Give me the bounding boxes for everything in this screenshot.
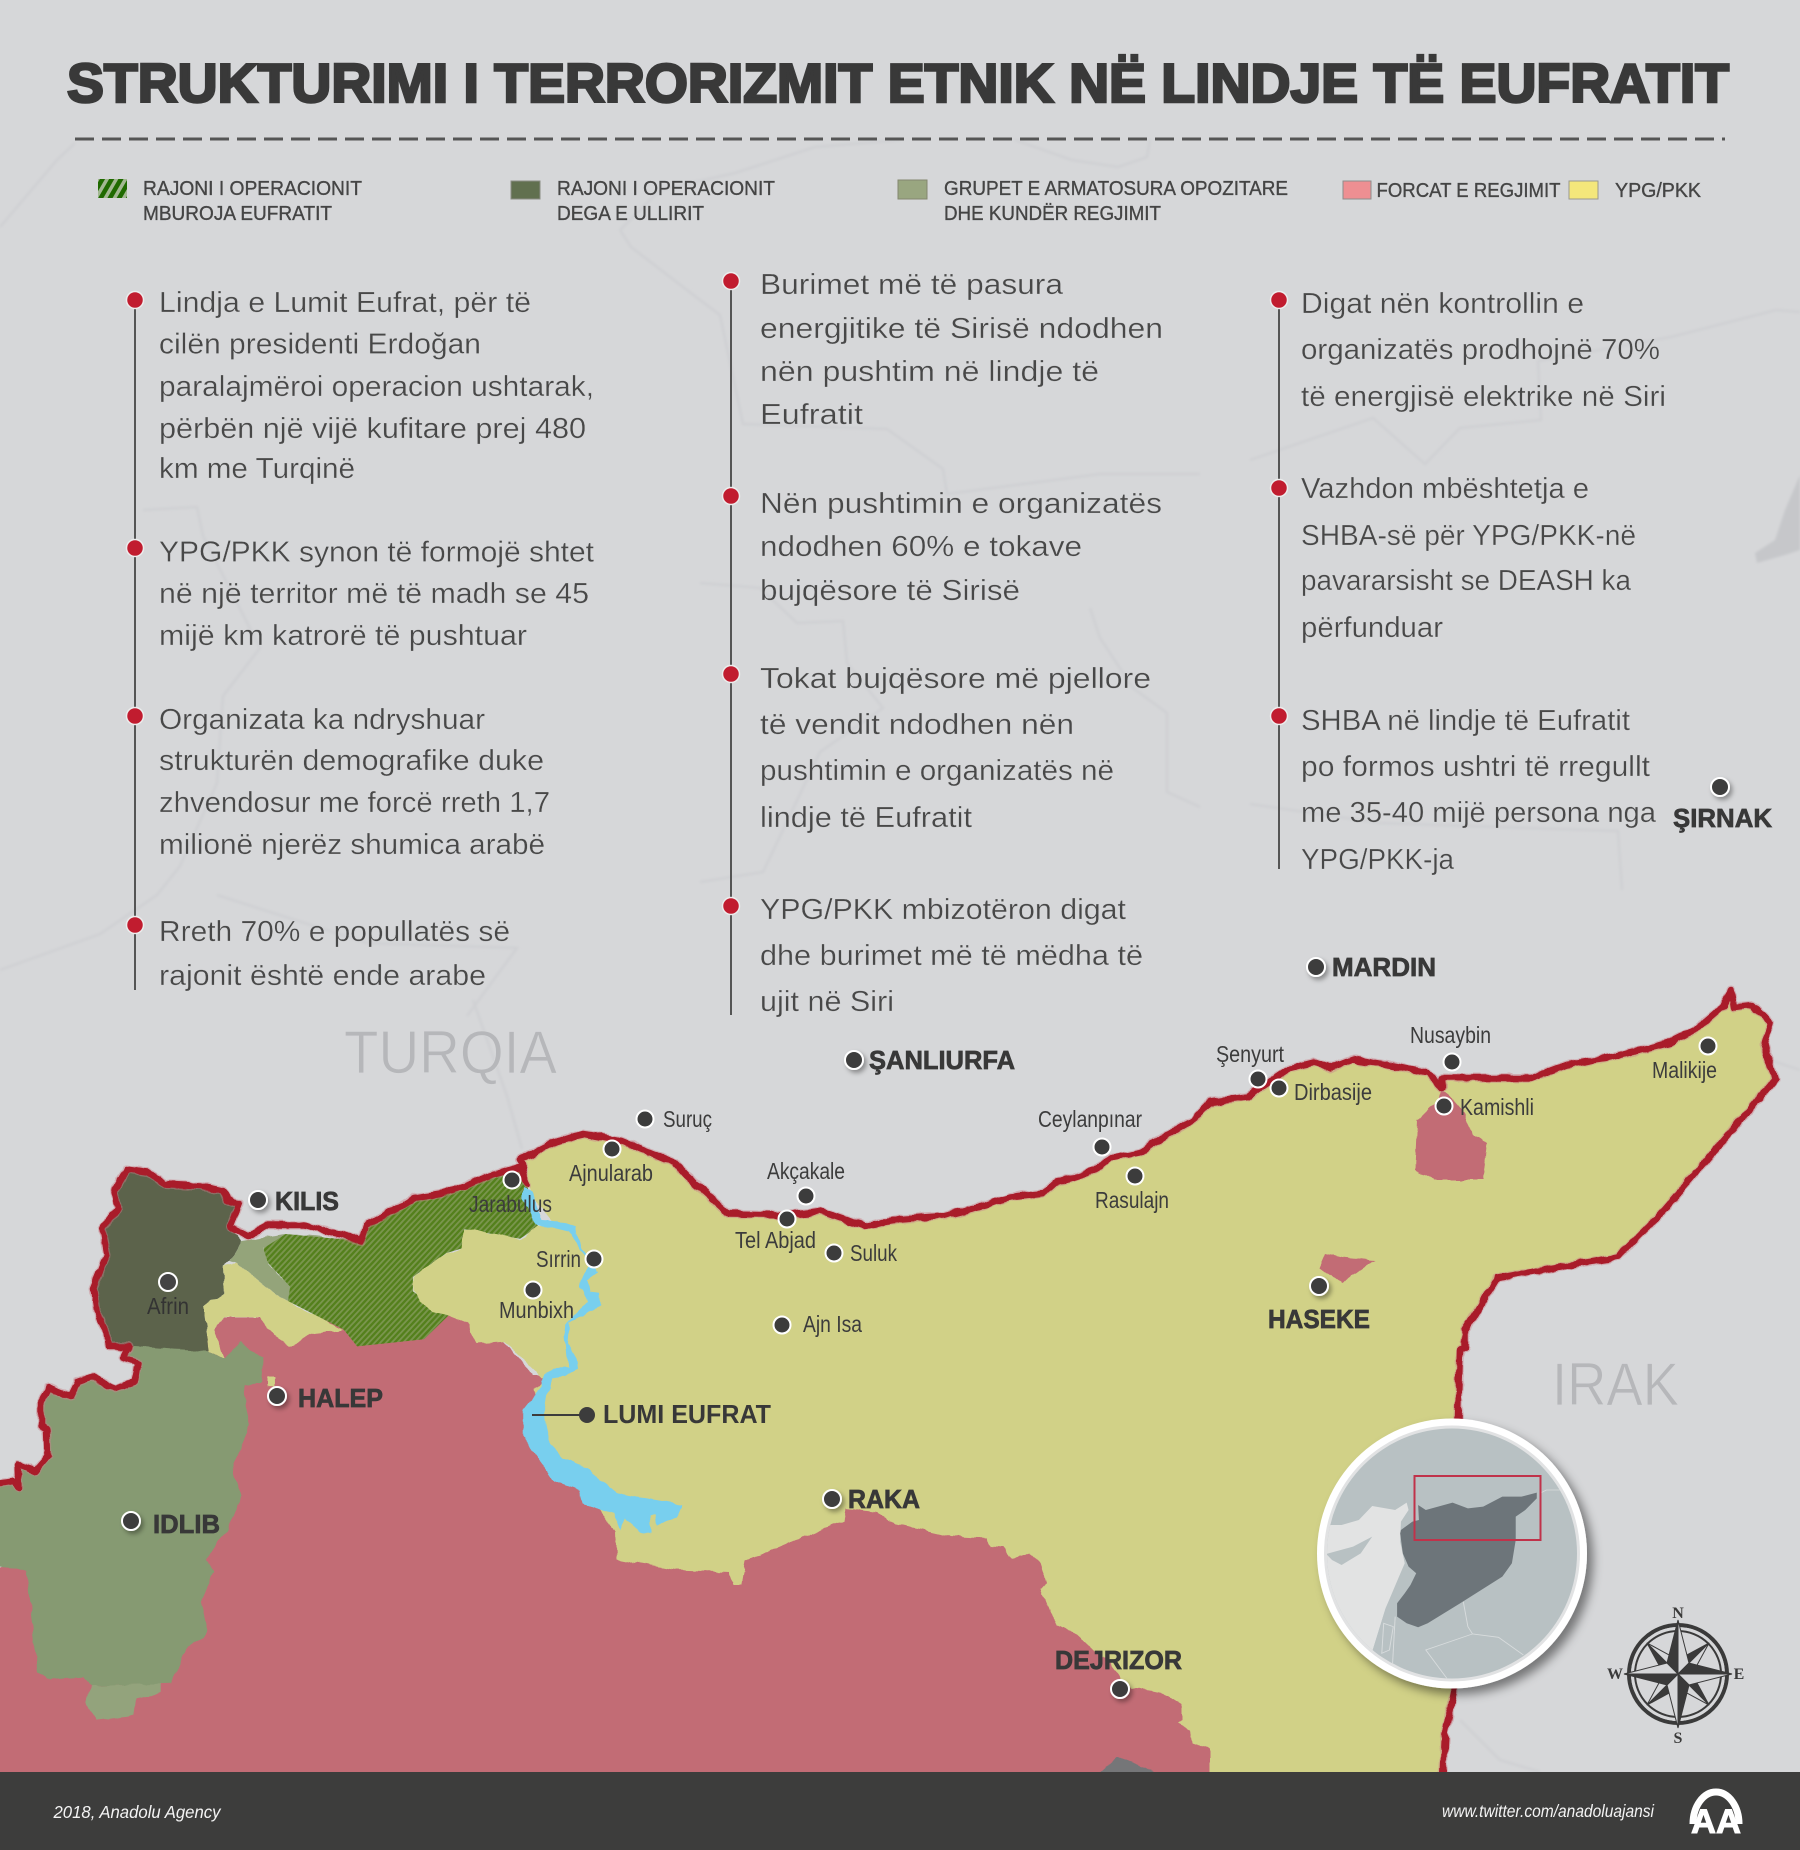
city: Afrin: Afrin — [147, 1293, 189, 1319]
city: Kamishli — [1436, 1094, 1534, 1120]
bullet text 3.1: të energjisë elektrike në Siri — [1301, 381, 1666, 413]
footer: credit: 2018, Anadolu Agency — [53, 1802, 222, 1822]
region: yellow band north of Aleppo — [203, 1263, 344, 1358]
bullet text 1.1: cilën presidenti Erdoğan — [159, 328, 481, 360]
bullet text 2.4: ujit në Siri — [760, 986, 894, 1018]
inset locator map — [1315, 1418, 1587, 1697]
city: Munbixh: Munbixh — [499, 1297, 574, 1323]
city: Mardin: MARDIN — [1332, 952, 1436, 982]
legend: Olive Branch: RAJONI I OPERACIONIT — [557, 177, 775, 200]
bullet text 1.2: në një territor më të madh se 45 — [159, 578, 589, 610]
bullet text 1.1: km me Turqinë — [159, 453, 355, 485]
country label: Iraq: IRAK — [1552, 1351, 1679, 1418]
city: Rasulajn — [1095, 1168, 1169, 1213]
city: Haseke — [1268, 1277, 1370, 1334]
bullet text 2.2: bujqësore të Sirisë — [760, 575, 1020, 607]
icon: AA logo: AA — [1691, 1803, 1741, 1841]
city: Idlib: IDLIB — [153, 1509, 220, 1539]
legend: opposition groups — [898, 177, 1288, 225]
region: Euphrates Shield — [263, 1167, 538, 1346]
border glow — [0, 990, 1775, 1778]
city: Malikije: Malikije — [1652, 1057, 1717, 1083]
region: Idlib opposition — [0, 1342, 263, 1686]
bullet text 3.3: me 35-40 mijë persona nga — [1301, 797, 1657, 829]
city: Ajn Isa: Ajn Isa — [803, 1311, 862, 1337]
compass rose: W — [1607, 1666, 1623, 1683]
city: Ceylanpınar — [1038, 1106, 1142, 1156]
city: Haseke: HASEKE — [1268, 1304, 1370, 1334]
bullet text 2.1: energjitike të Sirisë ndodhen — [760, 313, 1163, 345]
city: Kilis: KILIS — [275, 1186, 339, 1216]
legend: Olive Branch — [511, 177, 775, 225]
city: Şırnak: ŞIRNAK — [1673, 803, 1772, 833]
city: Nusaybin — [1410, 1022, 1491, 1070]
bullet text 3.2 — [1270, 473, 1636, 644]
city: Kilis — [249, 1186, 339, 1216]
compass rose: S — [1674, 1730, 1683, 1747]
bullet text 3.3: YPG/PKK-ja — [1301, 844, 1455, 876]
bullet text 2.1: nën pushtim në lindje të — [760, 356, 1099, 388]
label: Euphrates River callout: LUMI EUFRAT — [603, 1399, 771, 1429]
city: Malikije — [1652, 1038, 1717, 1083]
bullet text 1.1: paralajmëroi operacion ushtarak, — [159, 371, 594, 403]
compass rose — [1607, 1605, 1744, 1747]
city: Ajn Isa — [774, 1311, 862, 1337]
city: Tel Abjad: Tel Abjad — [735, 1227, 816, 1253]
legend: Euphrates Shield: RAJONI I OPERACIONIT — [143, 177, 362, 200]
panel: text column 2 — [722, 269, 1163, 1018]
city: Dirbasije: Dirbasije — [1294, 1079, 1372, 1105]
city: Sırrin: Sırrin — [536, 1246, 581, 1272]
legend: Euphrates Shield: MBUROJA EUFRATIT — [143, 202, 332, 225]
bullet text 2.3 — [722, 663, 1151, 834]
bullet text 1.3: Organizata ka ndryshuar — [159, 704, 485, 736]
bullet text 1.3 — [126, 704, 550, 861]
city: Şanlıurfa: ŞANLIURFA — [869, 1045, 1015, 1075]
bullet text 3.1 — [1270, 288, 1666, 413]
city: Şenyurt: Şenyurt — [1216, 1041, 1285, 1067]
city: Suruç — [636, 1106, 712, 1132]
city: Akçakale: Akçakale — [767, 1158, 845, 1184]
bullet text 2.4: YPG/PKK mbizotëron digat — [760, 894, 1126, 926]
map base regions — [0, 990, 1775, 1778]
region: Deir ez-Zor grey patch — [1093, 1757, 1168, 1778]
bullet text 1.3: strukturën demografike duke — [159, 745, 544, 777]
city: Munbixh — [499, 1282, 574, 1323]
bullet text 1.4 — [126, 916, 510, 992]
bullet text 3.3: po formos ushtri të rregullt — [1301, 751, 1650, 783]
panel: text column 1 — [126, 287, 594, 992]
bullet text 2.4 — [722, 894, 1143, 1018]
bullet text 1.1 — [126, 287, 594, 485]
city: Suluk — [826, 1240, 897, 1266]
inset: red extent box — [1414, 1476, 1540, 1540]
city: Nusaybin: Nusaybin — [1410, 1022, 1491, 1048]
bullet text 1.2: YPG/PKK synon të formojë shtet — [159, 536, 594, 568]
region: YPG/PKK east of the Euphrates — [520, 990, 1775, 1778]
city: Ajnularab: Ajnularab — [569, 1160, 653, 1186]
river: Euphrates — [522, 1188, 681, 1534]
inset: Mediterranean — [1327, 1502, 1408, 1666]
bullet text 3.1: Digat nën kontrollin e — [1301, 288, 1584, 320]
bullet text 1.1: Lindja e Lumit Eufrat, për të — [159, 287, 531, 319]
city: Afrin — [147, 1273, 189, 1319]
bullet text 1.3: milionë njerëz shumica arabë — [159, 829, 545, 861]
bullet text 3.2: përfunduar — [1301, 612, 1443, 644]
city: Ceylanpınar: Ceylanpınar — [1038, 1106, 1142, 1132]
legend — [98, 177, 1701, 225]
city: Akçakale — [767, 1158, 845, 1204]
bullet text 1.1: përbën një vijë kufitare prej 480 — [159, 413, 586, 445]
region: red pocket Kamishli — [1415, 1090, 1487, 1180]
compass rose: N — [1672, 1605, 1684, 1622]
map upper layer — [0, 990, 1775, 1778]
region: red pocket Haseke — [1319, 1253, 1374, 1284]
bullet text 3.2: Vazhdon mbështetja e — [1301, 473, 1589, 505]
bullet text 1.2: mijë km katrorë të pushtuar — [159, 620, 527, 652]
city: Ajnularab — [569, 1140, 653, 1186]
region: opposition band — [230, 1234, 362, 1301]
legend: YPG/PKK — [1569, 179, 1701, 202]
city: Dejrizor: DEJRIZOR — [1055, 1645, 1182, 1675]
legend: Euphrates Shield — [98, 177, 362, 225]
city: Tel Abjad — [735, 1210, 816, 1253]
inset: Lebanon and Israel strip — [1372, 1608, 1394, 1664]
city: Jarabulus — [469, 1172, 552, 1217]
bullet text 3.3: SHBA në lindje të Eufratit — [1301, 705, 1630, 737]
region: Afrin — [93, 1172, 241, 1351]
title: STRUKTURIMI I TERRORIZMIT ETNIK NË LINDJE TË EUFRATIT — [67, 52, 1729, 114]
legend: opposition groups: DHE KUNDËR REGJIMIT — [944, 202, 1161, 225]
legend: regime forces: FORCAT E REGJIMIT — [1376, 179, 1561, 202]
city: Şenyurt — [1216, 1041, 1285, 1088]
panel: text column 3 — [1270, 288, 1666, 876]
city: Şırnak — [1673, 778, 1772, 833]
city: Rasulajn: Rasulajn — [1095, 1187, 1169, 1213]
bullet text 3.3 — [1270, 705, 1657, 876]
region: Idlib southern tip — [85, 1684, 161, 1720]
city: Suruç: Suruç — [663, 1106, 712, 1132]
western regions — [0, 1172, 362, 1720]
inset: Cyprus — [1326, 1537, 1372, 1565]
map — [0, 990, 1775, 1778]
bullet text 1.2 — [126, 536, 594, 652]
region: Manbij pocket — [413, 1224, 589, 1378]
legend: YPG/PKK: YPG/PKK — [1615, 179, 1701, 202]
compass rose: E — [1734, 1666, 1744, 1683]
bullet text 2.3: Tokat bujqësore më pjellore — [760, 663, 1151, 695]
city: Idlib — [122, 1509, 220, 1539]
inset: Syria — [1397, 1493, 1537, 1627]
bullet text 1.3: zhvendosur me forcë rreth 1,7 — [159, 787, 550, 819]
bullet text 2.3: të vendit ndodhen nën — [760, 709, 1074, 741]
bullet text 3.2: SHBA-së për YPG/PKK-në — [1301, 520, 1636, 552]
legend: opposition groups: GRUPET E ARMATOSURA OPOZITARE — [944, 177, 1288, 200]
bullet text 3.1: organizatës prodhojnë 70% — [1301, 334, 1660, 366]
region: regime areas — [0, 1310, 1300, 1778]
terrain blob — [1755, 475, 1800, 563]
bullet text 2.2: Nën pushtimin e organizatës — [760, 488, 1162, 520]
bullet text 2.2 — [722, 488, 1162, 607]
label: Euphrates River callout — [532, 1399, 771, 1429]
city: Dirbasije — [1270, 1079, 1372, 1105]
bullet text 2.3: lindje të Eufratit — [760, 802, 972, 834]
city: Raka: RAKA — [848, 1484, 920, 1514]
bullet text 2.1: Burimet më të pasura — [760, 269, 1064, 301]
city: Kamishli: Kamishli — [1460, 1094, 1534, 1120]
footer: url: www.twitter.com/anadoluajansi — [1442, 1801, 1655, 1821]
bullet text 1.4: rajonit është ende arabe — [159, 960, 486, 992]
bullet text 3.2: pavararsisht se DEASH ka — [1301, 565, 1632, 597]
city: Dejrizor — [1055, 1645, 1182, 1698]
bullet text 1.4: Rreth 70% e popullatës së — [159, 916, 510, 948]
border line — [0, 990, 1775, 1778]
footer — [0, 1772, 1800, 1850]
bullet text 2.1 — [722, 269, 1163, 431]
bullet text 2.4: dhe burimet më të mëdha të — [760, 940, 1143, 972]
bullet text 2.3: pushtimin e organizatës në — [760, 755, 1114, 787]
bullet text 2.1: Eufratit — [760, 399, 863, 431]
city: Suluk: Suluk — [850, 1240, 897, 1266]
city: Jarabulus: Jarabulus — [469, 1191, 552, 1217]
region: yellow dot near Aleppo — [267, 1378, 275, 1386]
legend: Olive Branch: DEGA E ULLIRIT — [557, 202, 704, 225]
country label: Turkey: TURQIA — [344, 1019, 557, 1086]
bullet text 2.2: ndodhen 60% e tokave — [760, 531, 1082, 563]
city: Halep: HALEP — [298, 1383, 383, 1413]
